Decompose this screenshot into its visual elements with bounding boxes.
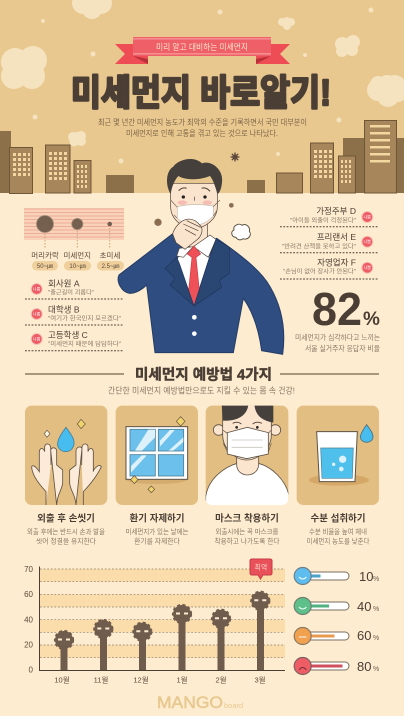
legend: thermometers: % [373, 666, 379, 673]
legend: thermometers: % [373, 576, 379, 583]
intro text [98, 117, 307, 138]
collar [177, 235, 216, 257]
illustration: man with mask coughing [118, 159, 284, 354]
statistic: 82 percent: 서울 실거주자 응답자 비율 [305, 344, 380, 353]
callout: peak: 최악 [255, 562, 268, 572]
card captions: 외출 후에는 반드시 손과 발을 [27, 527, 105, 536]
brows and eyes [179, 188, 210, 191]
card captions: 미세먼지 농도를 낮춘다 [306, 536, 370, 546]
panel: right testimonials: 나쁨 [364, 238, 371, 244]
panel: left testimonials: "미세먼지 때문에 답답하다" [48, 340, 121, 348]
chart: particle size comparison: 50~㎛ [37, 264, 53, 271]
ribbon text: 미리 알고 대비하는 미세먼지 [156, 42, 248, 52]
statistic: 82 percent: 미세먼지가 심각하다고 느끼는 [295, 333, 380, 342]
logo: board [224, 701, 243, 710]
card captions: 외출 후 손씻기 [37, 512, 95, 524]
statistic: 82 percent: % [363, 309, 380, 330]
legend: thermometers: 60 [357, 628, 371, 643]
chart: particle size comparison: 머리카락 [31, 251, 59, 260]
chart: monthly fine dust: 1월 [176, 674, 188, 684]
chart: particle size comparison [24, 208, 124, 271]
panel: right testimonials: "손님이 없어 장사가 안된다" [283, 268, 356, 276]
panel: left testimonials: 회사원 A [48, 278, 80, 288]
panel: left testimonials: 나쁨 [33, 286, 41, 292]
statistic: 82 percent [295, 283, 380, 353]
legend: thermometers [294, 568, 379, 674]
chart: monthly fine dust: 2월 [215, 674, 227, 684]
buildings skyline [0, 120, 404, 194]
tie [187, 246, 201, 306]
chart: monthly fine dust [24, 559, 285, 684]
card captions: 수분 섭취하기 [310, 512, 366, 524]
card: drinking water [297, 406, 379, 505]
buttons [192, 315, 197, 320]
chart: particle size comparison: 10~㎛ [69, 264, 86, 271]
intro text: 최근 몇 년간 미세먼지 농도가 최악의 수준을 기록하면서 국민 대부분이 [98, 117, 307, 127]
chart: monthly fine dust: 11월 [94, 674, 108, 684]
lapels [165, 257, 194, 306]
panel: right testimonials [280, 206, 379, 279]
chart: monthly fine dust: 40 [24, 616, 34, 624]
chart: monthly fine dust: 10월 [54, 674, 70, 684]
card: wearing mask [206, 403, 289, 507]
callout: peak [250, 559, 272, 579]
panel: right testimonials: "아이들 외출이 걱정된다" [290, 216, 356, 224]
section subtitle: 간단한 미세먼지 예방법만으로도 지킬 수 있는 몸 속 건강! [108, 386, 295, 396]
chart: monthly fine dust: 3월 [254, 674, 266, 684]
card captions: 외출시에는 꼭 마스크를 [216, 527, 278, 536]
section heading: 미세먼지 예방법 4가지 [135, 366, 272, 384]
card: washing hands [25, 406, 107, 505]
clouds [1, 0, 404, 164]
panel: right testimonials: 자영업자 F [317, 258, 356, 268]
panel: right testimonials: 나쁨 [364, 214, 371, 220]
chart: monthly fine dust: 60 [24, 590, 34, 599]
panel: header background [0, 0, 404, 193]
jacket [118, 233, 284, 354]
legend: thermometers: % [373, 606, 379, 613]
panel: left testimonials: "여기가 한국인지 모르겠다" [48, 314, 121, 322]
card captions: 환기 자제하기 [129, 512, 185, 524]
card captions: 마스크 착용하기 [215, 512, 279, 524]
chart: particle size comparison: 2.5~㎛ [102, 264, 119, 271]
card captions: 미세먼지가 있는 날에는 [126, 527, 188, 536]
panel: right testimonials: 프리랜서 E [317, 232, 356, 242]
panel: right testimonials: 나쁨 [364, 264, 371, 270]
chart: monthly fine dust: 12월 [133, 674, 149, 684]
legend: thermometers: 10 [359, 569, 373, 584]
panel: left testimonials: 나쁨 [33, 336, 41, 342]
card captions: 수분 비율을 높여 체내 [309, 527, 367, 536]
chart: monthly fine dust: 0 [29, 666, 34, 674]
chart: monthly fine dust: 20 [24, 640, 34, 650]
card: closing window [116, 406, 198, 505]
panel: right testimonials: "반려견 산책을 못하고 있다" [282, 242, 356, 250]
panel: left testimonials: "출근길이 괴롭다" [48, 288, 94, 296]
statistic: 82 percent: 82 [312, 283, 362, 335]
panel: right testimonials: 가정주부 D [316, 206, 356, 216]
mask [177, 204, 213, 225]
panel: left testimonials [25, 278, 124, 351]
chart: particle size comparison: 초미세 [100, 251, 120, 260]
panel: left testimonials: 나쁨 [33, 310, 41, 316]
title: 미세먼지 바로알기! [71, 72, 331, 113]
legend: thermometers: 80 [357, 659, 371, 674]
card captions: 환기를 자제한다 [134, 536, 181, 546]
ears and face [171, 183, 217, 228]
hair [167, 159, 222, 194]
intro text: 미세먼지로 인해 고통을 겪고 있는 것으로 나타났다. [126, 128, 278, 138]
chart: particle size comparison: 미세먼지 [63, 250, 91, 260]
neck [180, 217, 207, 250]
icon: dust particle [230, 152, 240, 162]
card captions: 착용하고 나가도록 한다 [214, 536, 280, 546]
logo: MANGO [157, 693, 223, 712]
ribbon banner [115, 37, 290, 64]
hand [173, 219, 202, 249]
panel: left testimonials: 고등학생 C [48, 330, 88, 340]
card captions: 씻어 청결을 유지한다 [36, 536, 97, 546]
legend: thermometers: % [373, 635, 379, 642]
cough cloud [232, 224, 250, 240]
shirt [177, 238, 212, 304]
panel: left testimonials: 대학생 B [48, 304, 80, 314]
chart: monthly fine dust: 70 [24, 565, 34, 574]
legend: thermometers: 40 [357, 599, 371, 614]
card captions [27, 512, 370, 546]
